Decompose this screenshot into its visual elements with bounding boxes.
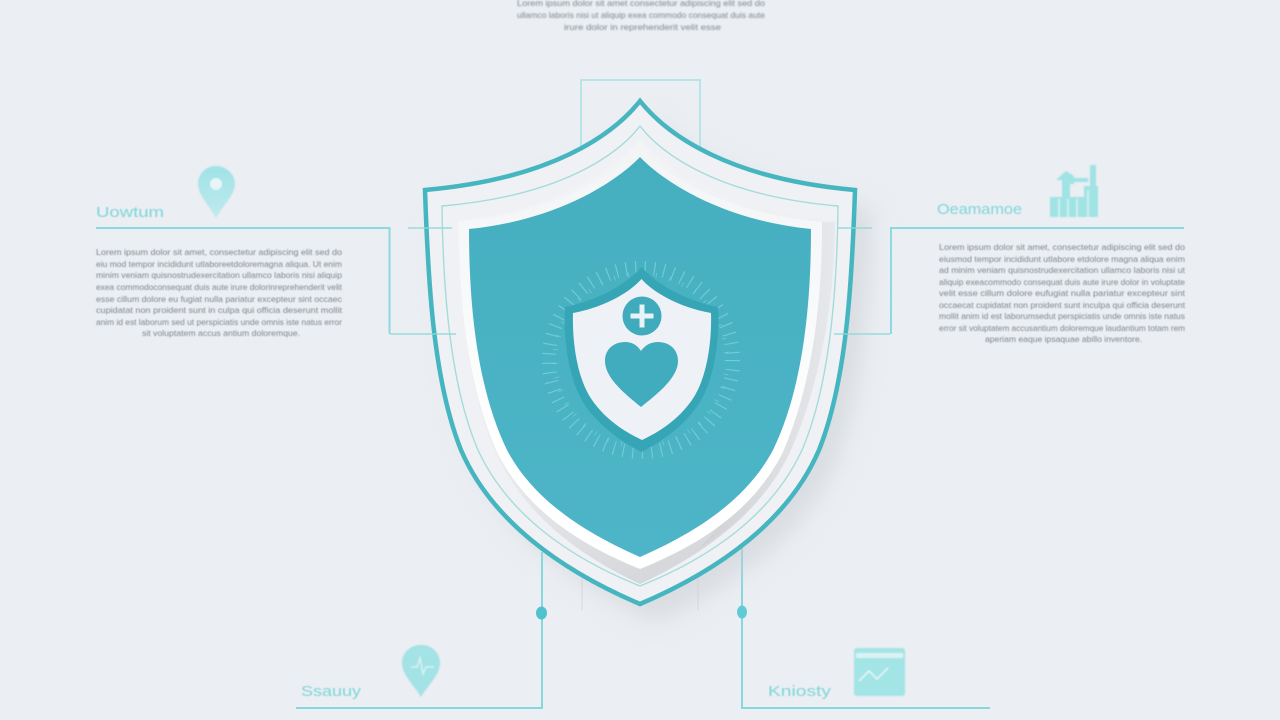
icon: location pin	[198, 166, 235, 218]
right text block: eiusmod tempor incididunt utlabore etdolore magna aliqua enim	[939, 254, 1185, 264]
right text block: aliquip exeacommodo consequat duis aute irure dolor in voluptate	[939, 277, 1185, 287]
panel: left	[96, 166, 343, 338]
right heading: Oeamamoe	[937, 201, 1022, 218]
shield side shading	[700, 222, 835, 548]
left text block: minim veniam quisnostrudexercitation ullamco laboris nisi aliquip	[96, 270, 342, 280]
left connector stub	[390, 228, 456, 334]
bottom left connector node	[536, 606, 547, 620]
panel: right	[937, 165, 1186, 344]
emblem white shield	[573, 279, 711, 440]
bottom left connector line	[296, 552, 542, 708]
shield bevel	[458, 140, 835, 584]
right connector stub	[834, 228, 890, 334]
bottom right connector node	[737, 606, 747, 618]
shield teal panel	[469, 157, 811, 557]
left heading: Uowtum	[96, 204, 164, 221]
main shield	[425, 101, 855, 604]
shield drop shadow	[440, 120, 872, 622]
emblem shield	[565, 267, 718, 452]
right text block: occaecat cupidatat non proident sunt inculpa qui officia deserunt	[939, 300, 1186, 310]
left text block: exea commodoconsequat duis aute irure dolorinreprehenderit velit	[96, 282, 343, 292]
left text block: sit voluptatem accus antium doloremque.	[142, 328, 300, 338]
right text block	[939, 242, 1186, 344]
top text block	[517, 0, 765, 32]
bottom right connector line	[742, 545, 990, 708]
bottom right heading: Kniosty	[768, 683, 832, 700]
right text block: aperiam eaque ipsaquae abillo inventore.	[985, 334, 1142, 344]
icon: heart	[605, 342, 678, 407]
top text block: ullamco laboris nisi ut aliquip exea commodo consequat duis aute	[517, 10, 765, 20]
faint guide lines	[582, 575, 698, 610]
left text block: cupidatat non proident sunt in culpa qui officia deserunt mollit	[96, 305, 343, 315]
emblem	[565, 267, 718, 452]
shield outer rim	[425, 101, 855, 604]
left text block: eiu mod tempor incididunt utlaboreetdoloremagna aliqua. Ut enim	[96, 259, 342, 269]
icon: pulse pin	[402, 645, 440, 697]
shield thin inner line	[442, 126, 838, 586]
icon: buildings chart	[1050, 165, 1098, 217]
left text block	[96, 247, 343, 338]
bottom left heading: Ssauuy	[301, 683, 362, 700]
right connector vertical	[891, 228, 1184, 334]
emblem rays	[549, 268, 733, 452]
panel: bottom left	[301, 645, 440, 700]
left connector vertical	[96, 228, 390, 334]
shield white edge	[459, 147, 822, 569]
right text block: Lorem ipsum dolor sit amet, consectetur adipiscing elit sed do	[939, 242, 1185, 252]
right text block: ad minim veniam quisnostrudexercitation ullamco laboris nisi ut	[939, 265, 1186, 275]
right text block: mollit anim id est laborumsedut perspiciatis unde omnis iste natus	[939, 311, 1185, 321]
icon: plus badge	[622, 296, 662, 336]
right text block: error sit voluptatem accusantium doloremque laudantium totam rem	[939, 323, 1185, 333]
right text block: velit esse cillum dolore eufugiat nulla pariatur excepteur sint	[939, 288, 1186, 298]
top connector box	[581, 80, 700, 154]
left text block: esse cillum dolore eu fugiat nulla pariatur excepteur sint occaec	[96, 294, 343, 304]
top text block: irure dolor in reprehenderit velit esse	[564, 22, 721, 32]
icon: monitor chart	[854, 648, 905, 696]
left text block: anim id est laborum sed ut perspiciatis unde omnis iste natus error	[96, 317, 342, 327]
left text block: Lorem ipsum dolor sit amet, consectetur adipiscing elit sed do	[96, 247, 342, 257]
panel: bottom right	[768, 648, 905, 700]
